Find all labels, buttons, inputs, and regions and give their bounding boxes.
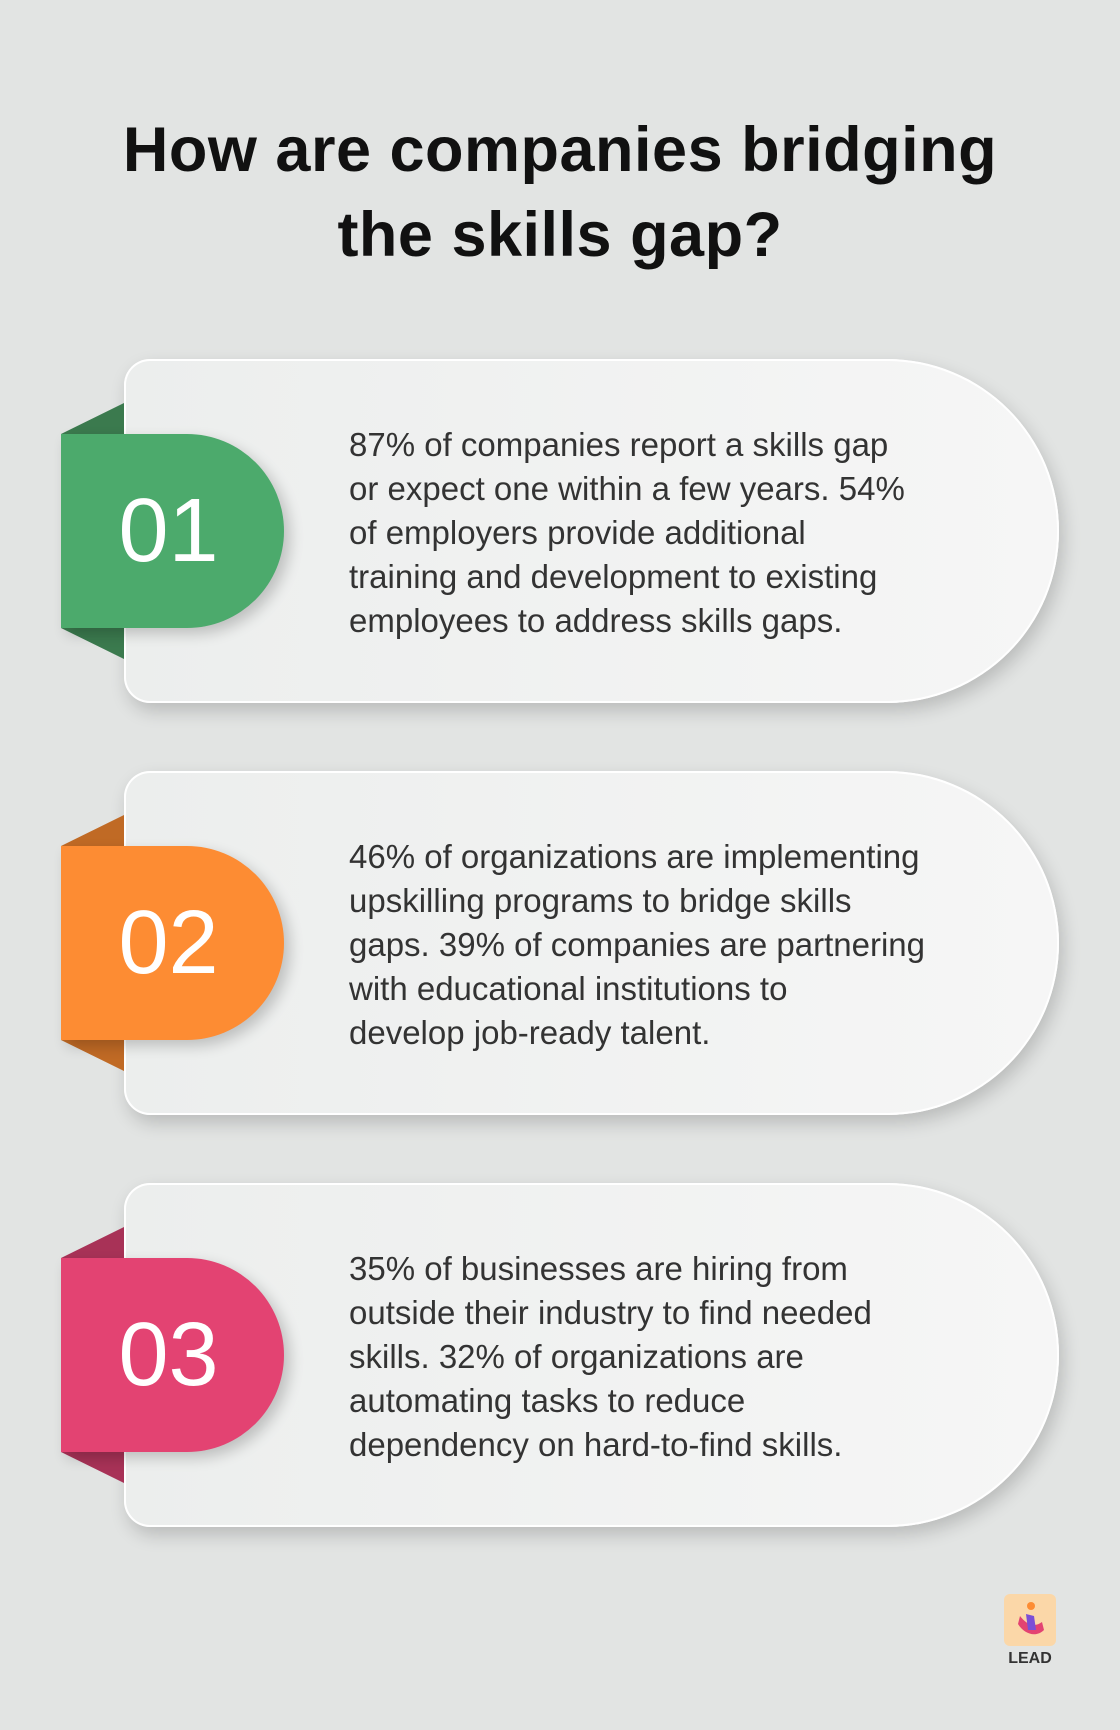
badge: 03: [61, 1258, 284, 1452]
text: card 2: upskilling programs to bridge skills: [349, 882, 852, 919]
panel: card 3: [124, 1183, 1059, 1527]
title: How are companies bridging: [123, 115, 997, 185]
text: card 2: gaps. 39% of companies are partnering: [349, 926, 925, 963]
text: card 3: dependency on hard-to-find skills.: [349, 1426, 842, 1463]
title: [123, 115, 997, 270]
fold: card 2 top: [61, 815, 124, 846]
text: card 1: of employers provide additional: [349, 514, 806, 551]
text: card 2: 46% of organizations are implementing: [349, 838, 920, 875]
fold: card 1 top: [61, 403, 124, 434]
fold: card 1 bottom: [61, 628, 124, 659]
text: card 1: employees to address skills gaps.: [349, 602, 842, 639]
text: card 3: skills. 32% of organizations are: [349, 1338, 804, 1375]
text: card 3: outside their industry to find needed: [349, 1294, 872, 1331]
badge: 03: 03: [118, 1305, 219, 1405]
text: card 3: automating tasks to reduce: [349, 1382, 745, 1419]
fold: card 3 top: [61, 1227, 124, 1258]
logo: [1004, 1594, 1056, 1667]
badge: 01: [61, 434, 284, 628]
badge: 02: 02: [118, 893, 219, 993]
badge: 02: [61, 846, 284, 1040]
badge: 01: 01: [118, 481, 219, 581]
fold: card 2 bottom: [61, 1040, 124, 1071]
text: card 1: training and development to existing: [349, 558, 877, 595]
text: card 1: or expect one within a few years. 54%: [349, 470, 905, 507]
icon: logo mark: [1004, 1594, 1056, 1646]
text: card 3: [349, 1250, 872, 1463]
text: card 2: develop job-ready talent.: [349, 1014, 710, 1051]
text: card 2: [349, 838, 925, 1051]
text: card 2: with educational institutions to: [349, 970, 787, 1007]
logo text: LEAD: [1008, 1650, 1052, 1667]
panel: card 2: [124, 771, 1059, 1115]
text: card 1: [349, 426, 905, 639]
panel: card 1: [124, 359, 1059, 703]
fold: card 3 bottom: [61, 1452, 124, 1483]
text: card 1: 87% of companies report a skills gap: [349, 426, 888, 463]
title: the skills gap?: [337, 200, 783, 270]
text: card 3: 35% of businesses are hiring from: [349, 1250, 848, 1287]
